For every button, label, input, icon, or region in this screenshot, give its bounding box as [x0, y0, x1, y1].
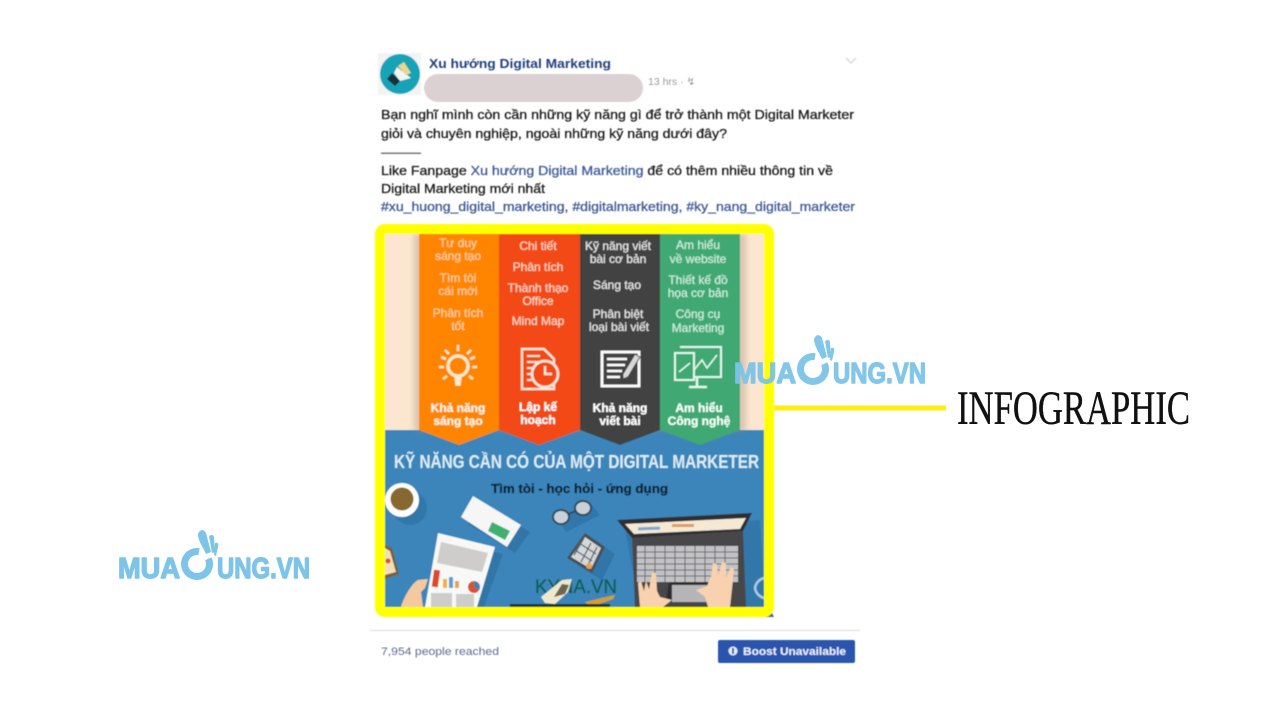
icon: report document with chart	[425, 533, 503, 607]
column: planning: Mind Map	[512, 314, 565, 328]
icon: notepad and pencil	[602, 352, 640, 386]
column: writing: Phân biệt	[593, 307, 644, 321]
column: creativity: Tìm tòi	[440, 271, 476, 285]
column: creativity	[419, 234, 499, 445]
post text: Like Fanpage Xu hướng Digital Marketing để có thêm nhiều thông tin về	[381, 163, 833, 178]
logo: Kyna.vn: KYNA.VN	[535, 577, 617, 598]
column: technology: Công nghệ	[668, 414, 731, 428]
column: planning: Lập kế	[519, 400, 557, 414]
column: creativity: Phân tích	[433, 306, 483, 320]
column: writing: Khả năng	[593, 401, 647, 415]
boost button	[718, 640, 855, 663]
icon: typing hands	[638, 562, 734, 607]
icon: monitor and tablet	[675, 347, 721, 387]
column shadows	[414, 234, 746, 432]
icon: envelope card	[461, 496, 530, 553]
column: creativity: sáng tạo	[435, 249, 481, 263]
column: planning: Office	[522, 294, 554, 308]
watermark: lower-left logo: MUA	[118, 553, 180, 585]
column: writing: bài cơ bản	[590, 252, 646, 266]
column: technology: Công cụ	[676, 307, 720, 321]
icon: glasses	[553, 501, 600, 532]
column: planning: Phân tích	[513, 260, 563, 274]
label: INFOGRAPHIC: INFOGRAPHIC	[957, 382, 1190, 435]
page name: Xu hướng Digital Marketing	[429, 56, 611, 71]
cream background	[384, 233, 766, 433]
column: planning	[499, 234, 580, 445]
column: writing	[580, 234, 660, 445]
icon: left hand	[401, 579, 428, 607]
column: planning: Chi tiết	[519, 239, 557, 253]
infographic subtitle: Tìm tòi - học hỏi - ứng dụng	[491, 482, 668, 496]
watermark: lower-left logo: UNG.VN	[217, 553, 310, 585]
watermark: center logo	[734, 335, 926, 390]
column: creativity: cái mới	[438, 284, 478, 298]
column: technology: về website	[670, 252, 727, 266]
menu chevron	[846, 58, 856, 63]
column: technology: Thiết kế đồ	[668, 273, 728, 287]
column: technology: Marketing	[672, 321, 724, 335]
logo: Kyna.vn	[510, 577, 617, 607]
icon: calculator	[567, 533, 615, 580]
post avatar	[378, 53, 421, 95]
watermark: center logo: UNG.VN	[833, 358, 926, 390]
column: technology: họa cơ bản	[668, 286, 728, 300]
column: creativity: sáng tạo	[433, 414, 483, 428]
connector line	[774, 406, 946, 410]
icon: document with clock	[522, 349, 558, 389]
watermark: center logo: MUA	[734, 358, 796, 390]
post text	[381, 107, 856, 214]
column: writing: Kỹ năng viết	[585, 239, 652, 253]
column: writing: Sáng tạo	[593, 278, 641, 292]
column: writing: viết bài	[599, 414, 641, 428]
yellow highlight frame	[380, 229, 774, 617]
post text: Digital Marketing mới nhất	[381, 181, 545, 196]
post text: giỏi và chuyên nghiệp, ngoài những kỹ năng dưới đây?	[381, 126, 727, 141]
column: technology	[660, 234, 740, 445]
post time: 13 hrs · ↯	[648, 76, 695, 88]
post text: #xu_huong_digital_marketing, #digitalmarketing, #ky_nang_digital_marketer	[381, 199, 856, 214]
icon: coffee cup	[385, 483, 427, 525]
blue lower panel	[384, 430, 766, 609]
panel: skills infographic	[380, 229, 774, 617]
column: planning: hoạch	[520, 413, 556, 427]
infographic title: KỸ NĂNG CẦN CÓ CỦA MỘT DIGITAL MARKETER	[394, 451, 759, 472]
icon: mouse	[755, 578, 764, 598]
icon: light bulb	[439, 345, 477, 385]
watermark: lower-left logo	[118, 530, 310, 585]
column: writing: loại bài viết	[589, 320, 650, 334]
column: technology: Am hiểu	[675, 401, 723, 415]
column: creativity: tốt	[451, 319, 465, 333]
column: creativity: Tư duy	[439, 236, 477, 250]
footer divider and reach: 7,954 people reached	[381, 646, 499, 658]
column: creativity: Khả năng	[431, 401, 485, 415]
panel: Facebook post	[370, 53, 860, 663]
boost button: Boost Unavailable	[743, 646, 846, 658]
column: planning: Thành thạo	[508, 281, 569, 295]
icon: phone	[385, 545, 399, 579]
icon: laptop	[617, 513, 765, 607]
column: technology: Am hiểu	[676, 238, 720, 252]
redacted name pill	[424, 74, 643, 102]
post text: Bạn nghĩ mình còn cần những kỹ năng gì để trở thành một Digital Marketer	[381, 107, 855, 122]
